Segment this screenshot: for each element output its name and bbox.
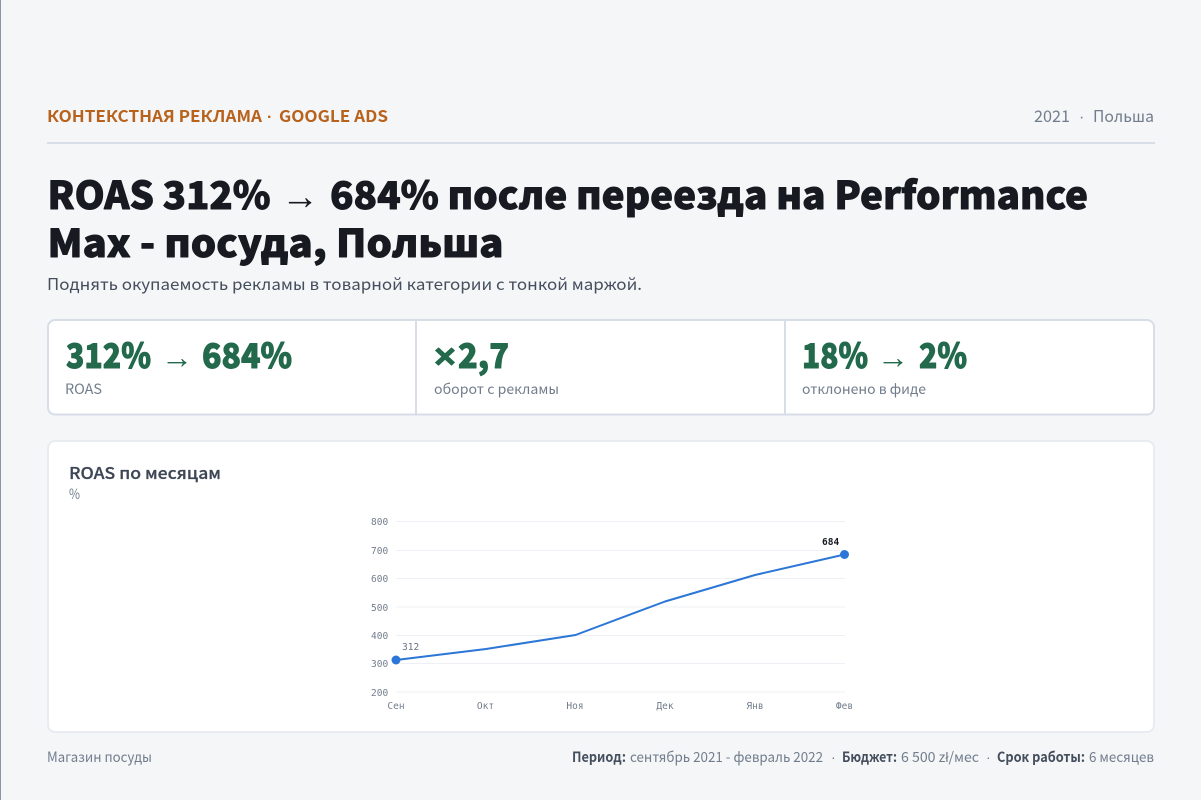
start value: 312 [402,642,419,653]
y axis labels: 800 [371,517,388,528]
KPI: ROAS: 684% [202,329,292,378]
x axis labels: Фев [836,701,853,712]
x axis labels: Окт [477,701,494,712]
client: Магазин посуды [47,747,152,767]
footer [47,747,1154,767]
KPI: rejected in feed: → [877,339,909,375]
KPI: ROAS [65,329,292,399]
KPI: turnover [434,329,559,399]
title: → [281,176,319,218]
KPI: rejected in feed [802,329,967,399]
x axis labels: Ноя [566,701,584,712]
subtitle: Поднять окупаемость рекламы в товарной категории с тонкой маржой. [47,271,642,295]
KPI: turnover: × [434,338,456,376]
kicker: КОНТЕКСТНАЯ РЕКЛАМА [47,103,263,127]
y axis labels [371,517,388,699]
start point [392,656,400,664]
y axis labels: 300 [371,659,388,670]
y axis labels: 600 [371,574,388,585]
KPI: rejected in feed: 2% [919,329,967,378]
KPI: turnover: оборот с рекламы [434,379,559,399]
year and country: Польша [1093,103,1154,127]
title: ROAS 312% [48,165,270,220]
kicker: GOOGLE ADS [279,103,388,127]
panel: chart [48,441,1154,732]
project facts: 6 500 zł/мес [901,747,979,767]
project facts: Период: [572,747,626,767]
KPI: ROAS: ROAS [65,379,102,399]
chart unit: % [69,484,80,504]
project facts [572,747,1154,767]
kicker [47,103,388,127]
panel: KPI strip [48,320,1154,414]
title: Max - посуда, Польша [48,213,504,268]
title [48,165,1088,268]
line series [396,554,844,660]
x axis labels: Сен [387,701,405,712]
KPI: rejected in feed: отклонено в фиде [802,379,926,399]
project facts: · [831,749,836,765]
end value: 684 [822,537,839,548]
header [47,103,1155,144]
end point [840,550,849,559]
year and country: 2021 [1034,103,1070,127]
project facts: · [986,749,991,765]
x axis labels [387,701,853,712]
year and country: · [1079,109,1084,126]
year and country [1034,103,1154,127]
y axis labels: 700 [371,546,388,557]
KPI: rejected in feed: 18% [802,329,868,378]
kicker: · [267,109,272,126]
x axis labels: Дек [656,701,674,712]
y axis labels: 400 [371,631,388,642]
y axis labels: 500 [371,603,388,614]
KPI: ROAS: → [161,339,193,375]
KPI: ROAS: 312% [66,329,151,378]
project facts: Срок работы: [997,747,1085,767]
KPI: turnover: 2,7 [458,329,509,378]
project facts: сентябрь 2021 - февраль 2022 [630,747,823,767]
title: 684% после переезда на Performance [330,165,1088,220]
project facts: 6 месяцев [1089,747,1154,767]
project facts: Бюджет: [842,747,897,767]
y axis labels: 200 [371,688,388,699]
chart title: ROAS по месяцам [69,460,221,484]
line chart [371,517,853,712]
x axis labels: Янв [746,701,764,712]
